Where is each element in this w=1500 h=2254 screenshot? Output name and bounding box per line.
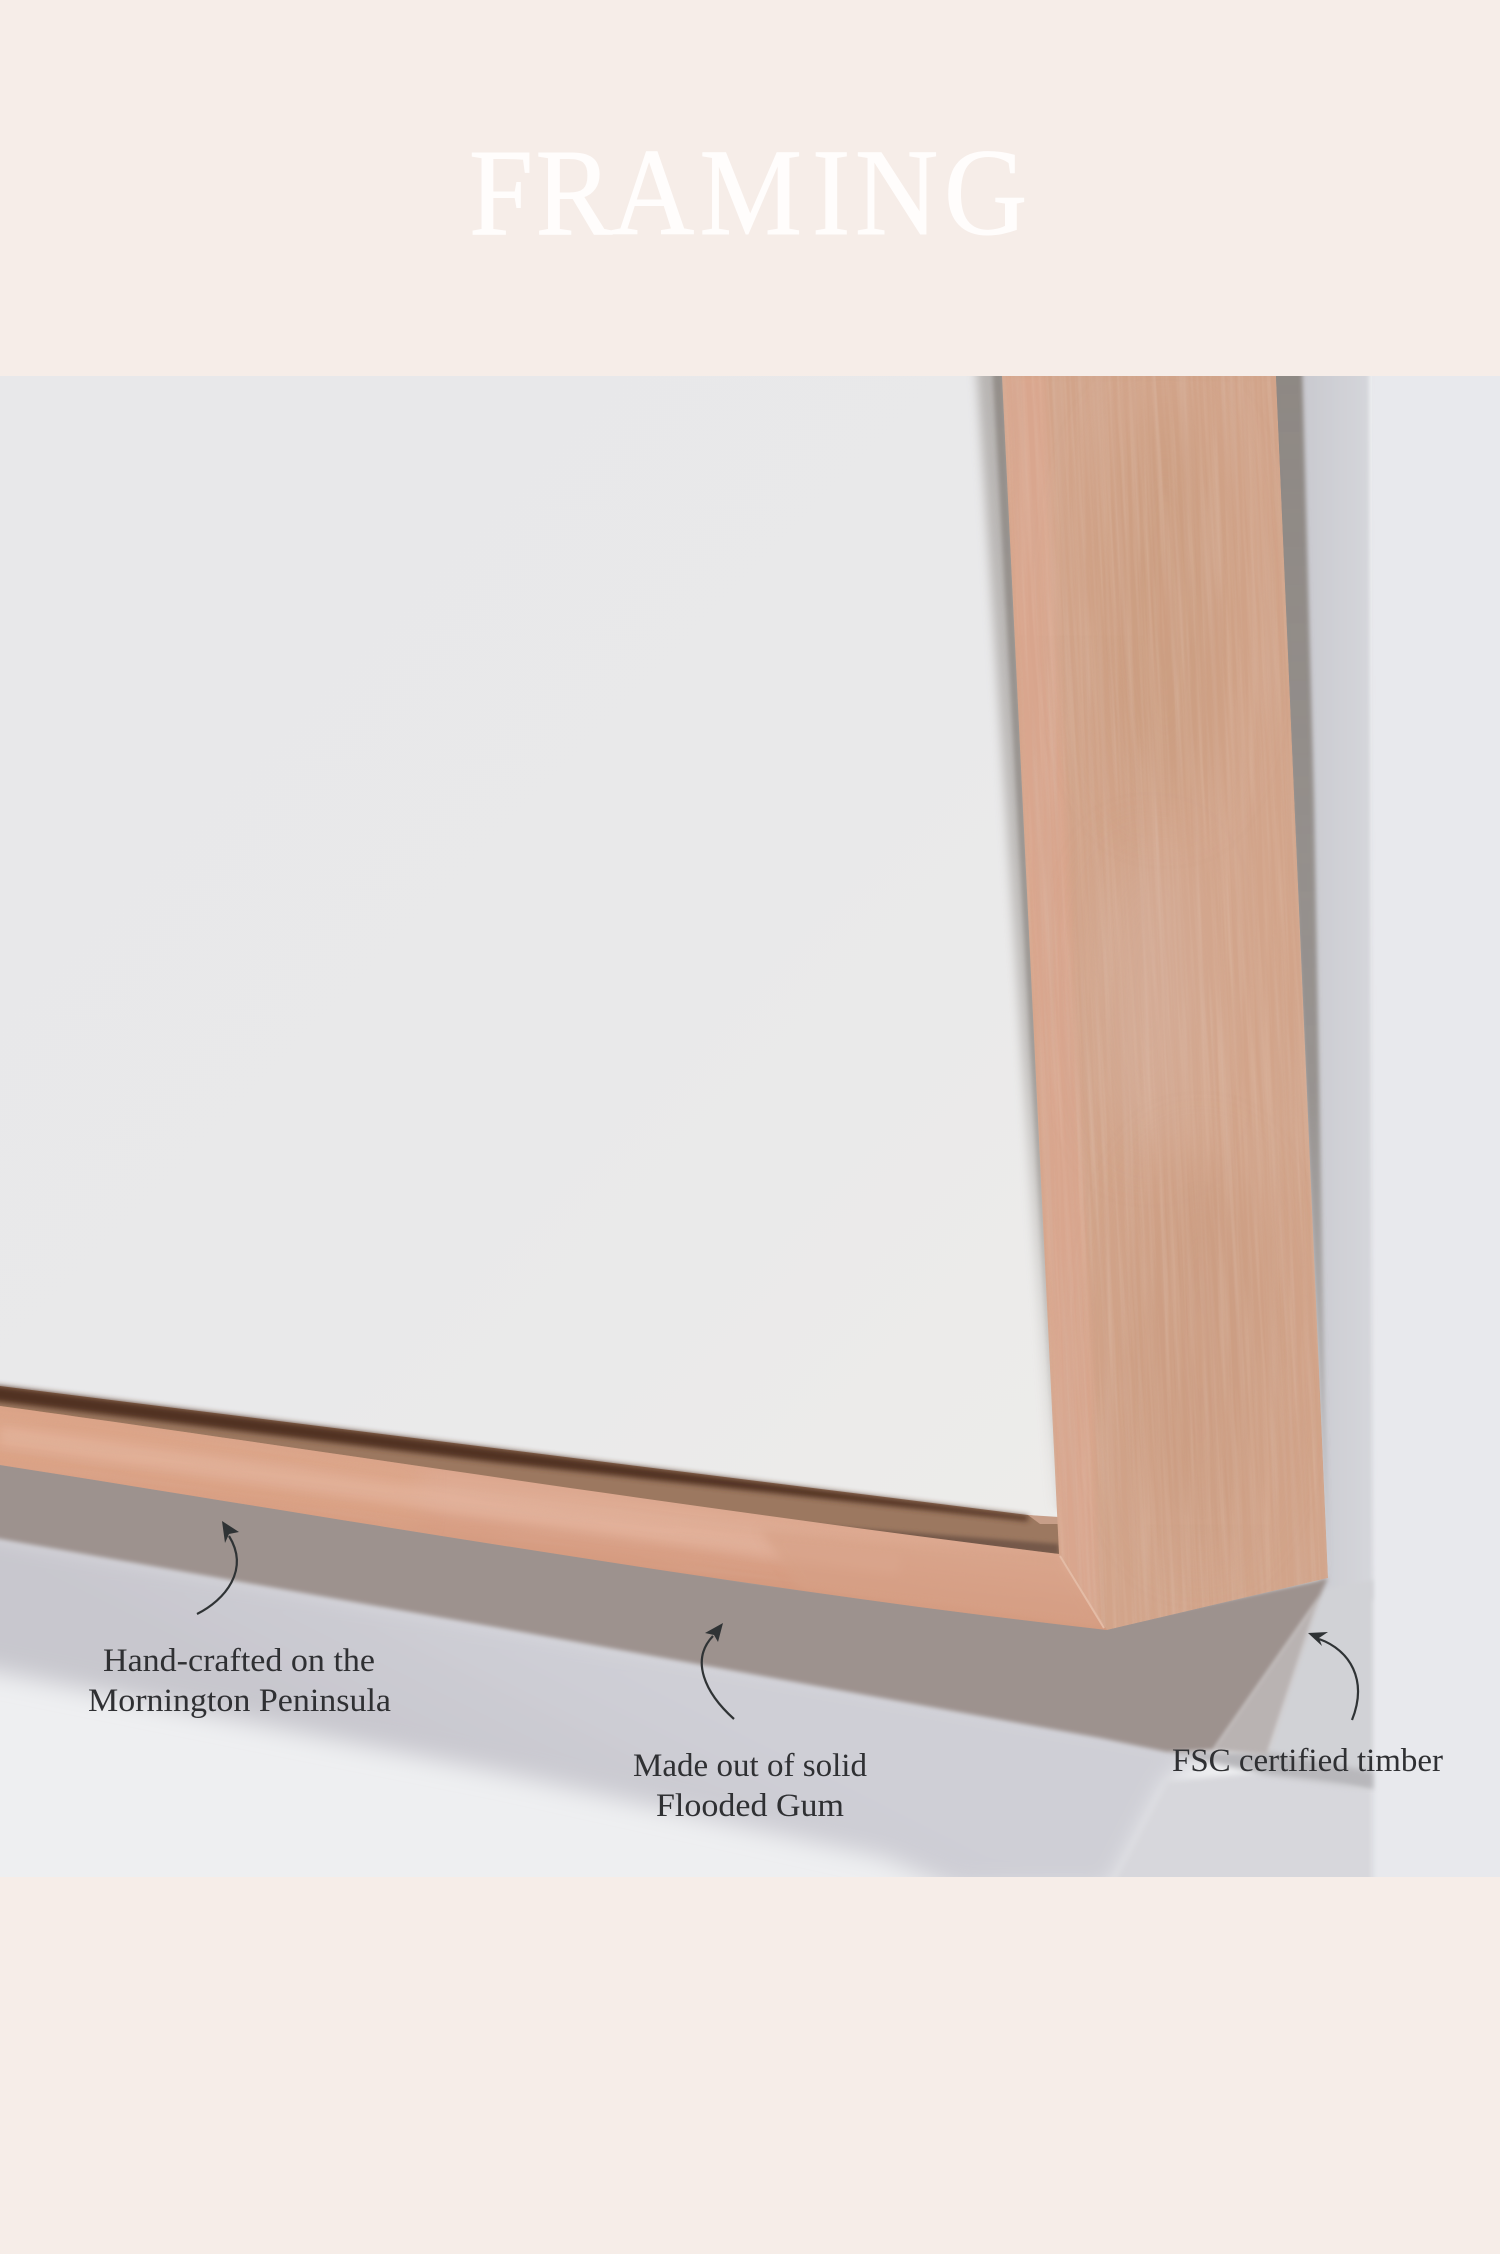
post dark grain bbox=[930, 332, 1390, 1668]
wall: lit panel under the corner bbox=[1119, 1773, 1374, 1877]
gap: dark upper line bbox=[0, 1381, 1028, 1521]
title: FRAMING bbox=[469, 123, 1027, 261]
arrow: hand-crafted bbox=[197, 1521, 239, 1614]
post inner bevel bbox=[1002, 376, 1100, 1630]
bottom rail bbox=[0, 1406, 1107, 1630]
band below timber label bbox=[1167, 1752, 1373, 1789]
post light grain bbox=[930, 332, 1390, 1668]
wall shadow: strip under frame corner bbox=[1269, 1596, 1374, 1775]
arrow: fsc timber bbox=[1308, 1632, 1358, 1720]
wall: far right strip bbox=[1372, 376, 1500, 1877]
rail wood face bbox=[0, 1406, 1107, 1630]
post pale patch bbox=[1100, 850, 1200, 1150]
label: flooded gum: Made out of solid bbox=[633, 1748, 867, 1784]
label: hand-crafted: Mornington Peninsula bbox=[88, 1683, 391, 1719]
post dark patch lower bbox=[1130, 1150, 1270, 1550]
label: fsc timber: FSC certified timber bbox=[1172, 1743, 1443, 1779]
right post bbox=[1002, 376, 1328, 1630]
label: hand-crafted: Hand-crafted on the bbox=[103, 1643, 375, 1679]
rail highlight ridge bbox=[2, 1430, 772, 1556]
wall shadow: dark strip beside post, tapering bbox=[1276, 376, 1328, 1493]
label: flooded gum: Flooded Gum bbox=[656, 1788, 844, 1824]
wall: dark shadow below rail bbox=[0, 1450, 1328, 1752]
wall shadow: lavender right of post bbox=[1298, 376, 1374, 1590]
canvas: dark edge against post bbox=[991, 376, 1055, 1472]
wall: wedge lit shadow bbox=[1213, 1596, 1320, 1755]
rail end tone bbox=[768, 1534, 1067, 1578]
rail left deep tone bbox=[0, 1425, 413, 1485]
label: hand-crafted bbox=[88, 1643, 391, 1719]
wall bbox=[0, 376, 1500, 1877]
photo: framed canvas corner bbox=[0, 332, 1500, 1890]
post dark patch upper bbox=[1095, 410, 1235, 810]
mitre joint highlight bbox=[1060, 1556, 1104, 1628]
post wood face bbox=[1002, 376, 1328, 1630]
canvas: soft shadow along post bbox=[972, 376, 1052, 1426]
framing infographic bbox=[0, 151, 1500, 1877]
gap between canvas and rail bbox=[0, 1381, 1059, 1560]
canvas bbox=[0, 376, 1059, 1517]
arrow: flooded gum bbox=[702, 1623, 734, 1719]
label: flooded gum bbox=[633, 1748, 867, 1824]
gap: shade at inner corner bbox=[838, 1525, 1060, 1556]
canvas fold at corner bbox=[1028, 1515, 1059, 1524]
rail grain bbox=[0, 1278, 1134, 1717]
wall: lower lavender shadow bbox=[0, 1520, 1213, 1890]
